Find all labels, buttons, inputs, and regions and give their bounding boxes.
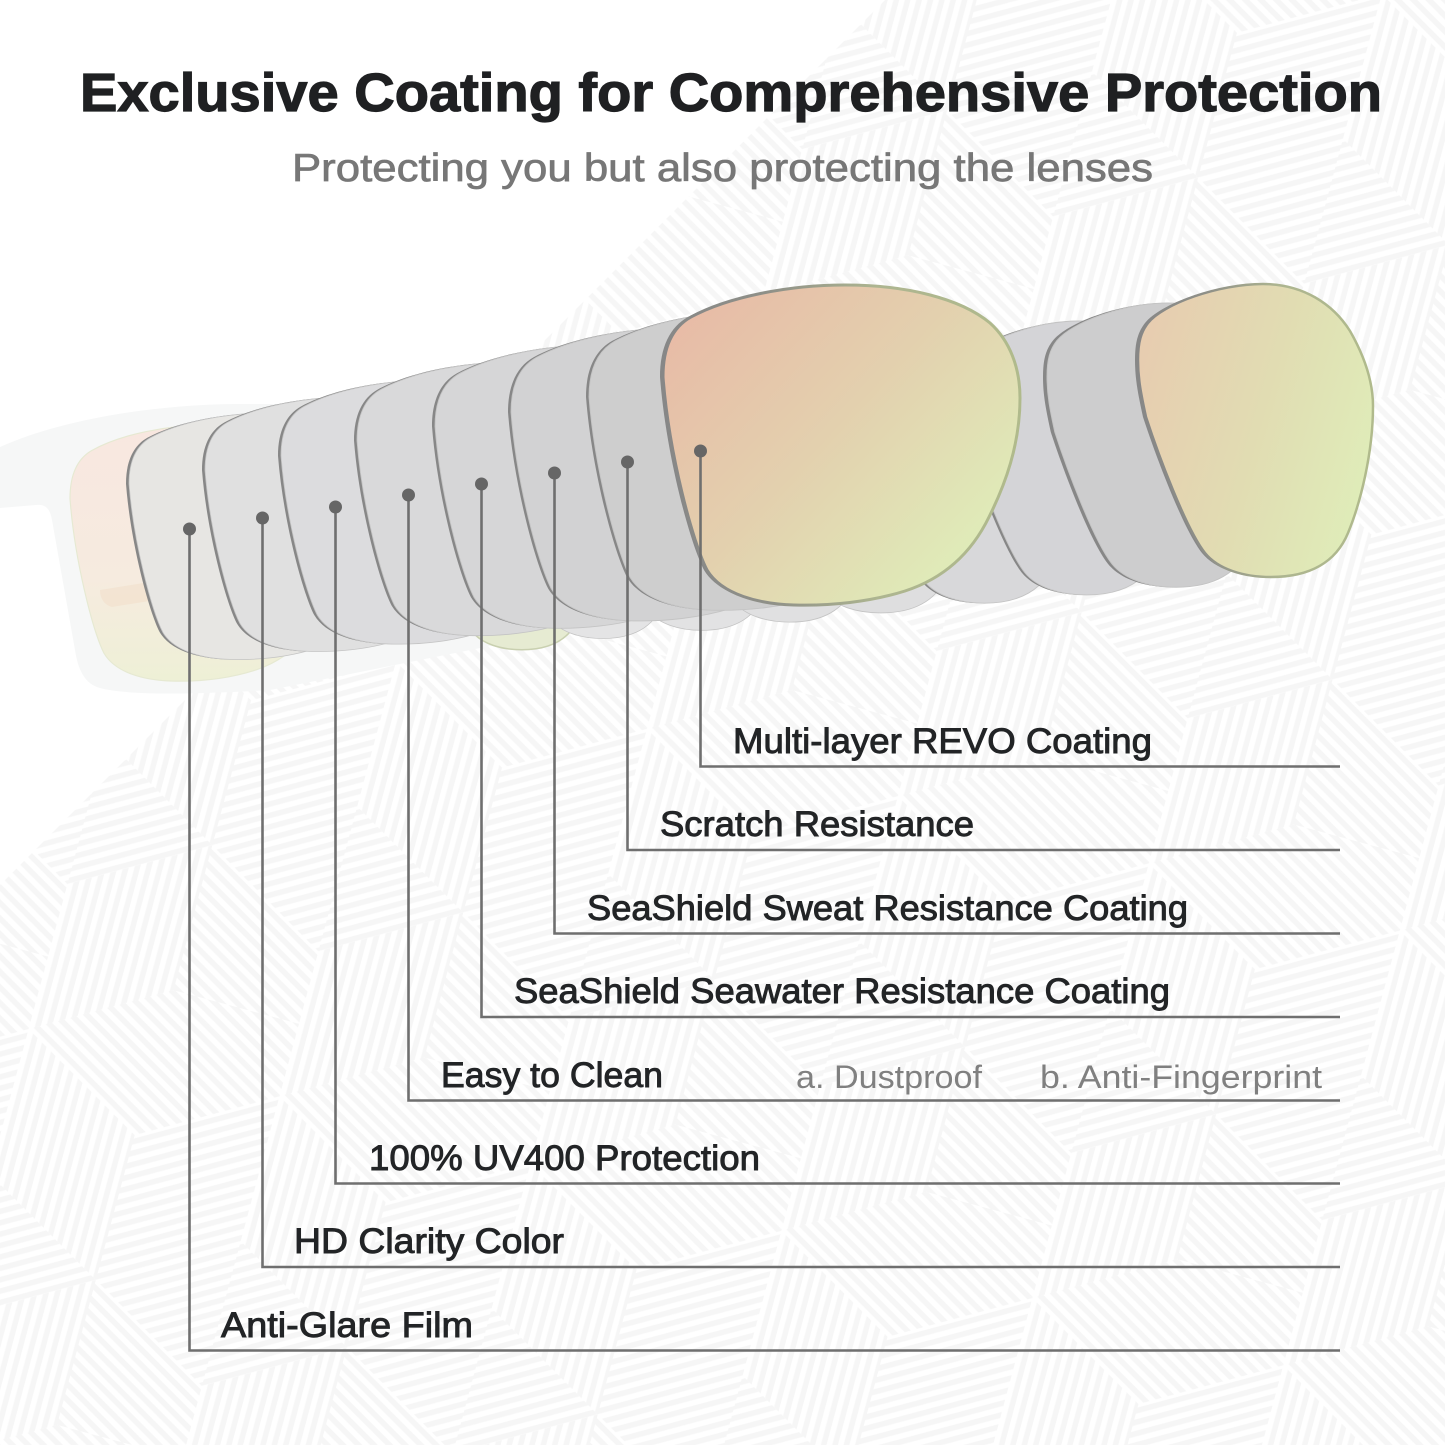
- callout: HD Clarity Color: HD Clarity Color: [294, 1222, 564, 1261]
- callout: Scratch Resistance: [621, 456, 1340, 850]
- callout: Anti-Glare Film: Anti-Glare Film: [221, 1306, 473, 1345]
- callout: SeaShield Seawater Resistance Coating: SeaShield Seawater Resistance Coating: [514, 972, 1170, 1011]
- callout: Multi-layer REVO Coating: Multi-layer REVO Coating: [733, 722, 1152, 761]
- callout: 100% UV400 Protection: [329, 500, 1340, 1184]
- subtitle: Protecting you but also protecting the lenses: [292, 147, 1153, 190]
- callout: Anti-Glare Film: [183, 522, 1340, 1350]
- callout: SeaShield Sweat Resistance Coating: SeaShield Sweat Resistance Coating: [587, 889, 1188, 928]
- callout: Easy to Clean: b. Anti-Fingerprint: [1040, 1059, 1322, 1095]
- callout: Multi-layer REVO Coating: [694, 444, 1340, 766]
- callout: Easy to Clean: a. Dustproof: [796, 1059, 982, 1095]
- sunglasses with exploded lens layers: [0, 284, 1373, 694]
- glasses frame: [0, 404, 520, 694]
- callout: SeaShield Seawater Resistance Coating: [475, 478, 1340, 1017]
- front main lens: [660, 285, 1020, 605]
- title: Exclusive Coating for Comprehensive Protection: [80, 63, 1382, 123]
- callout: Easy to Clean: Easy to Clean: [441, 1056, 663, 1095]
- left lens layers: [126, 311, 923, 660]
- right lens layers: [422, 303, 1275, 650]
- back lens, frame side: [70, 425, 345, 681]
- front right lens: [1135, 284, 1373, 577]
- callout: SeaShield Sweat Resistance Coating: [548, 466, 1340, 934]
- callout: Easy to Clean: [402, 488, 1340, 1100]
- callout: 100% UV400 Protection: 100% UV400 Protection: [369, 1139, 760, 1178]
- callout: Scratch Resistance: Scratch Resistance: [660, 805, 974, 844]
- callout: HD Clarity Color: [256, 512, 1340, 1267]
